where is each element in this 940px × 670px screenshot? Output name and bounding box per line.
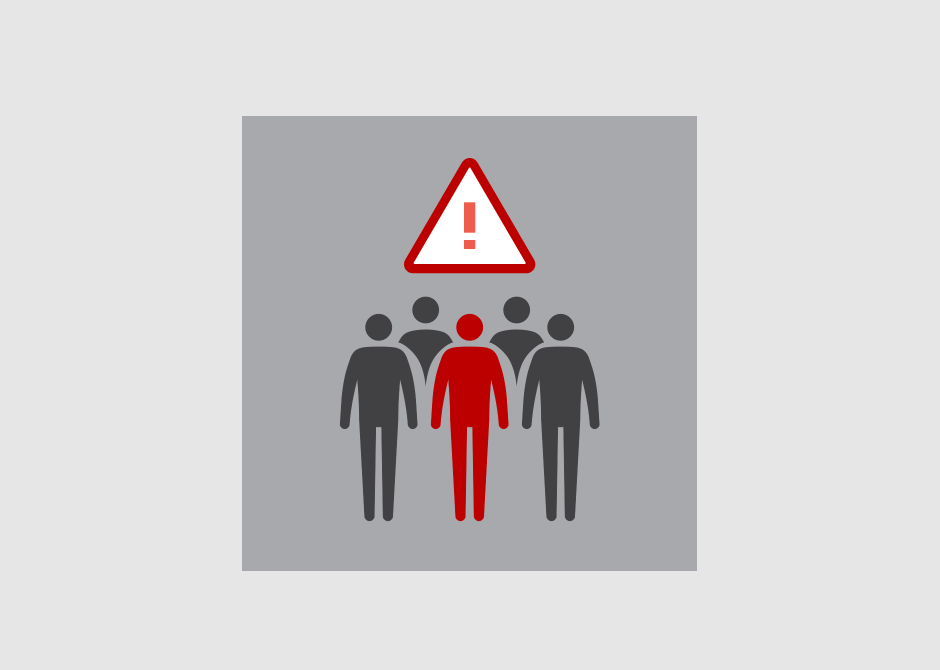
icon: warning triangle xyxy=(413,167,526,264)
icon: front person centre red xyxy=(431,314,508,521)
icon: back person right xyxy=(489,297,544,386)
icon: back person left xyxy=(398,297,453,386)
icon: front person right xyxy=(522,314,599,521)
panel: grey square xyxy=(242,116,697,571)
icon: front person left xyxy=(340,314,417,521)
